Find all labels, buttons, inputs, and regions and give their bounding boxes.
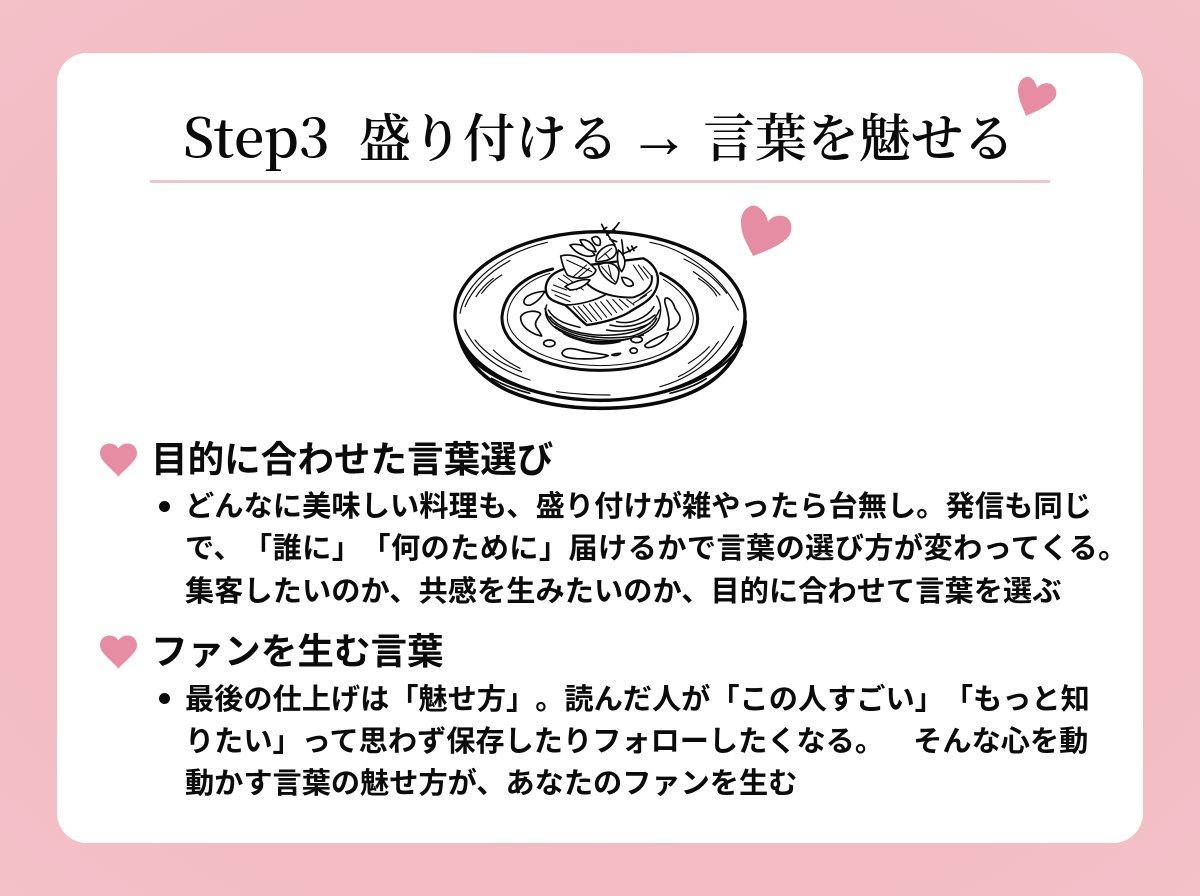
title underline	[150, 180, 1050, 183]
fish fillet	[546, 258, 658, 325]
rim hatch lines	[460, 242, 738, 395]
panel: white card	[57, 53, 1143, 843]
title: 盛り付ける	[359, 97, 619, 172]
section 1	[100, 439, 1128, 608]
icon: title heart	[1018, 76, 1056, 116]
section 2 body text: りたい」って思わず保存したりフォローしたくなる。 そんな心を動	[185, 726, 1088, 758]
section 2 bullet	[159, 693, 170, 704]
section 1 heading: 目的に合わせた言葉選び	[151, 439, 553, 480]
spaghetti nest	[545, 296, 661, 344]
section 2	[100, 631, 1090, 800]
title	[183, 96, 1015, 173]
section 1 body text: で、「誰に」「何のために」届けるかで言葉の選び方が変わってくる。	[185, 533, 1128, 565]
section 1 bullet	[159, 501, 170, 512]
herb garnish	[561, 223, 637, 290]
title: Step3	[183, 96, 330, 173]
section 1 body text: どんなに美味しい料理も、盛り付けが雑やったら台無し。発信も同じ	[185, 491, 1092, 523]
section 1 body text: 集客したいのか、共感を生みたいのか、目的に合わせて言葉を選ぶ	[185, 576, 1062, 608]
section 1 body text	[185, 490, 1128, 608]
section 2 body text	[185, 684, 1090, 800]
plate rim	[455, 232, 745, 408]
title: →	[628, 103, 690, 171]
section 2 body text: 動かす言葉の魅せ方が、あなたのファンを生む	[185, 768, 797, 800]
section 2 heading: ファンを生む言葉	[151, 631, 444, 672]
icon: plate heart	[741, 206, 792, 256]
icon: section 2 heart	[100, 636, 137, 668]
icon: section 1 heart	[100, 444, 137, 476]
section 2 body text: 最後の仕上げは「魅せ方」。読んだ人が「この人すごい」「もっと知	[185, 684, 1090, 716]
sauce drops	[521, 291, 680, 359]
title: 言葉を魅せる	[703, 97, 1015, 172]
illustration: plated dish	[453, 222, 748, 410]
